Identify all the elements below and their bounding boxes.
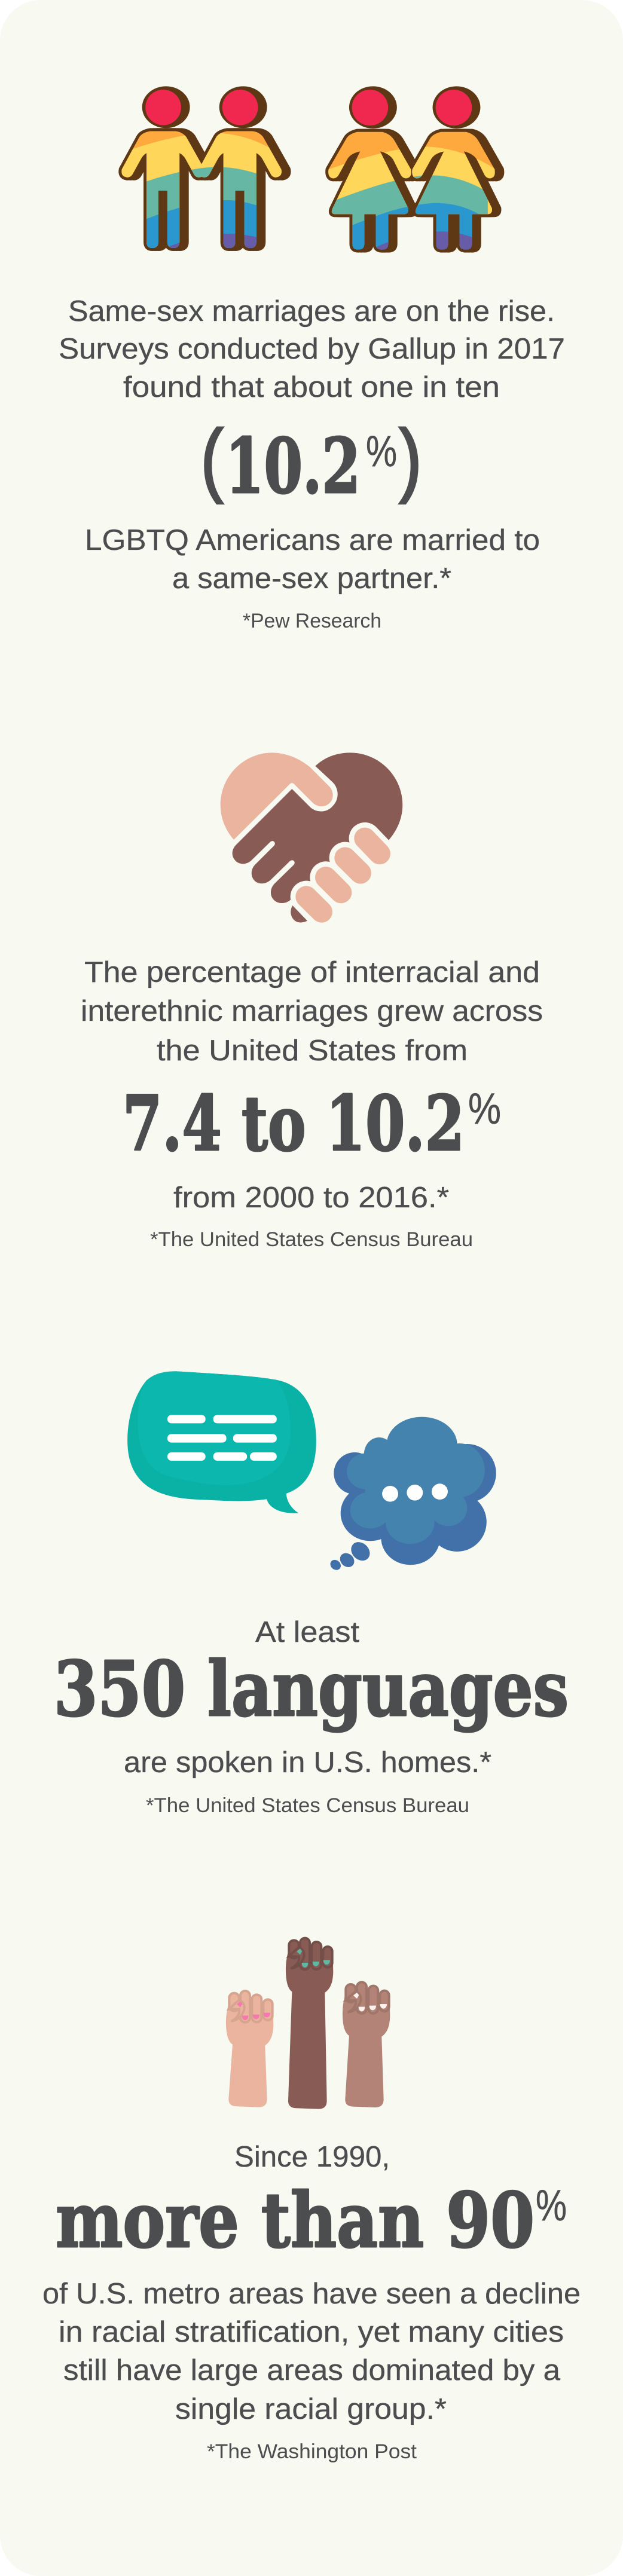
source: *Pew Research [243,610,381,632]
big stat: more than 90%: more than 90 [56,2176,535,2265]
intro text [59,295,565,403]
source: *The United States Census Bureau [146,1794,469,1817]
icon: medium fist [343,1982,390,2107]
intro text: Same-sex marriages are on the rise. [68,295,555,328]
icon: three raised fists [226,1938,390,2109]
panel: racial stratification [42,1938,581,2463]
intro text: At least [255,1616,359,1648]
closing text: LGBTQ Americans are married to [85,524,540,556]
intro text: the United States from [157,1035,468,1067]
closing text: a same-sex partner.* [172,562,451,595]
icon: female couple [323,86,510,259]
icon: dark fist [286,1938,333,2109]
closing text: from 2000 to 2016.* [173,1182,449,1214]
source: *The United States Census Bureau [150,1228,473,1251]
icon: teal speech bubble [127,1371,316,1513]
icon: speech and thought bubbles [127,1371,496,1571]
icon: blue thought bubble [329,1417,496,1571]
intro text: Surveys conducted by Gallup in 2017 [59,333,565,365]
intro text: The percentage of interracial and [84,956,540,989]
icon: handshake heart [221,752,402,922]
big stat: 10.2%: ) [399,413,422,504]
intro text: Since 1990, [234,2141,390,2173]
big stat: 7.4 to 10.2%: % [468,1085,501,1133]
closing text [85,524,540,595]
icon: rainbow couples holding hands [114,86,510,259]
big stat: more than 90%: % [536,2182,567,2230]
panel: interracial marriages [81,752,543,1251]
intro text: interethnic marriages grew across [81,995,543,1027]
big stat: 10.2%: 10.2 [225,422,361,510]
icon: light fist [226,1991,273,2107]
closing text: are spoken in U.S. homes.* [124,1746,491,1779]
intro text [81,956,543,1067]
closing text: still have large areas dominated by a [63,2354,561,2387]
closing text: single racial group.* [175,2393,447,2425]
closing text: of U.S. metro areas have seen a decline [42,2278,581,2310]
source: *The Washington Post [207,2440,417,2463]
big stat: 10.2%: % [366,427,397,476]
closing text: in racial stratification, yet many cities [59,2316,564,2348]
intro text: found that about one in ten [123,371,500,403]
closing text [42,2278,581,2425]
big stat: 10.2%: ( [201,413,223,504]
big stat: 7.4 to 10.2%: 7.4 to 10.2 [123,1079,465,1168]
icon: male couple [114,86,290,259]
panel: languages [54,1371,569,1817]
panel: same-sex marriages [59,86,565,632]
